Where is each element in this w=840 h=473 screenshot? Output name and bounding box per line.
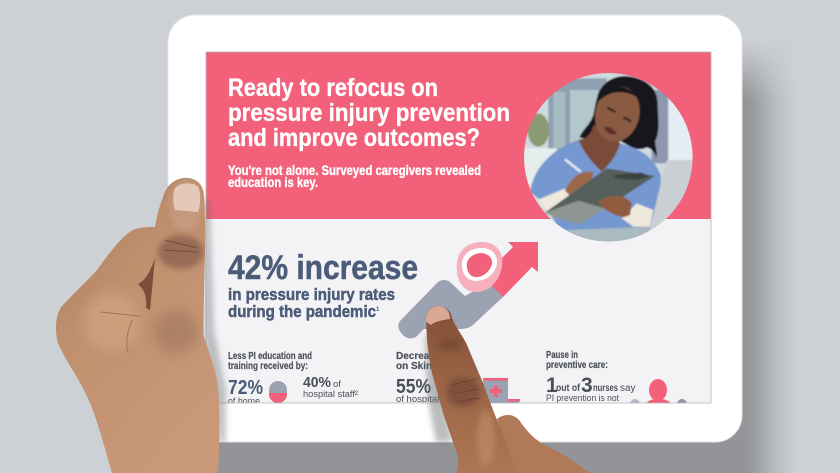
hair	[579, 76, 658, 157]
subheading: during the pandemic	[228, 302, 376, 321]
tablet body	[168, 15, 742, 442]
thumb knuckle	[158, 235, 204, 269]
arrow tail	[398, 280, 503, 338]
subheading: 1	[376, 307, 380, 313]
palm highlight	[86, 294, 136, 348]
screen background	[206, 219, 710, 402]
title	[228, 74, 510, 152]
column: decrease on skin checks: on Skin Ch	[396, 361, 448, 372]
column: decrease on skin checks: 55%	[396, 376, 431, 398]
pen	[565, 159, 581, 172]
laptop	[649, 160, 693, 235]
fingernail	[426, 306, 450, 325]
column: pause in preventive care: 1	[546, 374, 558, 397]
photo: nurse writing on clipboard	[520, 70, 697, 247]
thumbnail	[173, 183, 200, 212]
column: less PI education: of	[333, 379, 341, 390]
column: less PI education: training received by:	[228, 361, 308, 372]
heading: 42% increase: 42% increase	[228, 249, 418, 287]
sleeves	[537, 188, 572, 217]
icon: pill	[269, 381, 287, 403]
column: less PI education: Less PI education and	[228, 351, 312, 362]
subheading	[228, 285, 395, 321]
column: pause in preventive care	[546, 350, 687, 403]
shadow of left hand on tablet	[204, 200, 226, 442]
column: decrease on skin checks: Decrease	[396, 351, 441, 362]
pointing finger	[426, 306, 510, 473]
wound circle	[457, 242, 502, 292]
column: decrease on skin checks: of hospital-b	[396, 394, 448, 405]
thumb tip highlight	[169, 179, 201, 231]
scrubs	[530, 140, 661, 232]
subtitle: You're not alone. Surveyed caregivers revealed	[228, 162, 481, 178]
column: pause in preventive care: PI prevention is not	[546, 393, 619, 404]
neck	[578, 125, 620, 172]
face	[594, 86, 641, 142]
second finger	[497, 415, 590, 473]
web shadow between thumb and fingers	[138, 258, 155, 310]
column: less PI education: hospital staff²	[303, 389, 358, 400]
clipboard	[545, 168, 655, 213]
column: decrease on skin checks	[396, 351, 520, 405]
icon: people	[630, 379, 687, 403]
title: and improve outcomes?	[228, 124, 480, 152]
subtitle: education is key.	[228, 174, 318, 190]
panel: pink header	[206, 52, 711, 219]
subheading: in pressure injury rates	[228, 285, 395, 304]
column: less PI education	[228, 351, 358, 407]
finger highlight	[477, 410, 495, 466]
column: pause in preventive care: out of	[556, 383, 581, 394]
icon: hospital	[483, 378, 520, 404]
tablet shadow	[215, 40, 796, 473]
screen edge	[206, 52, 711, 403]
arrow head	[492, 242, 538, 297]
column: pause in preventive care: nurses	[593, 383, 618, 394]
title: Ready to refocus on	[228, 74, 438, 102]
column: pause in preventive care: say	[620, 383, 636, 394]
shadow of pointing finger	[425, 335, 452, 442]
column: pause in preventive care: 3	[581, 374, 593, 397]
column: less PI education: 40%	[303, 374, 331, 391]
icon: rising arrow with skin wound	[398, 242, 538, 338]
supporting hand	[598, 196, 632, 217]
left hand holding tablet	[56, 178, 219, 473]
column: pause in preventive care: preventive care:	[546, 360, 608, 371]
knuckles	[438, 339, 462, 351]
column: less PI education: of home	[228, 396, 260, 407]
tablet screen	[206, 52, 711, 409]
column: less PI education: 72%	[228, 377, 263, 399]
writing hand	[565, 171, 593, 197]
column: pause in preventive care: Pause in	[546, 350, 578, 361]
subtitle	[228, 162, 481, 190]
title: pressure injury prevention	[228, 99, 510, 127]
